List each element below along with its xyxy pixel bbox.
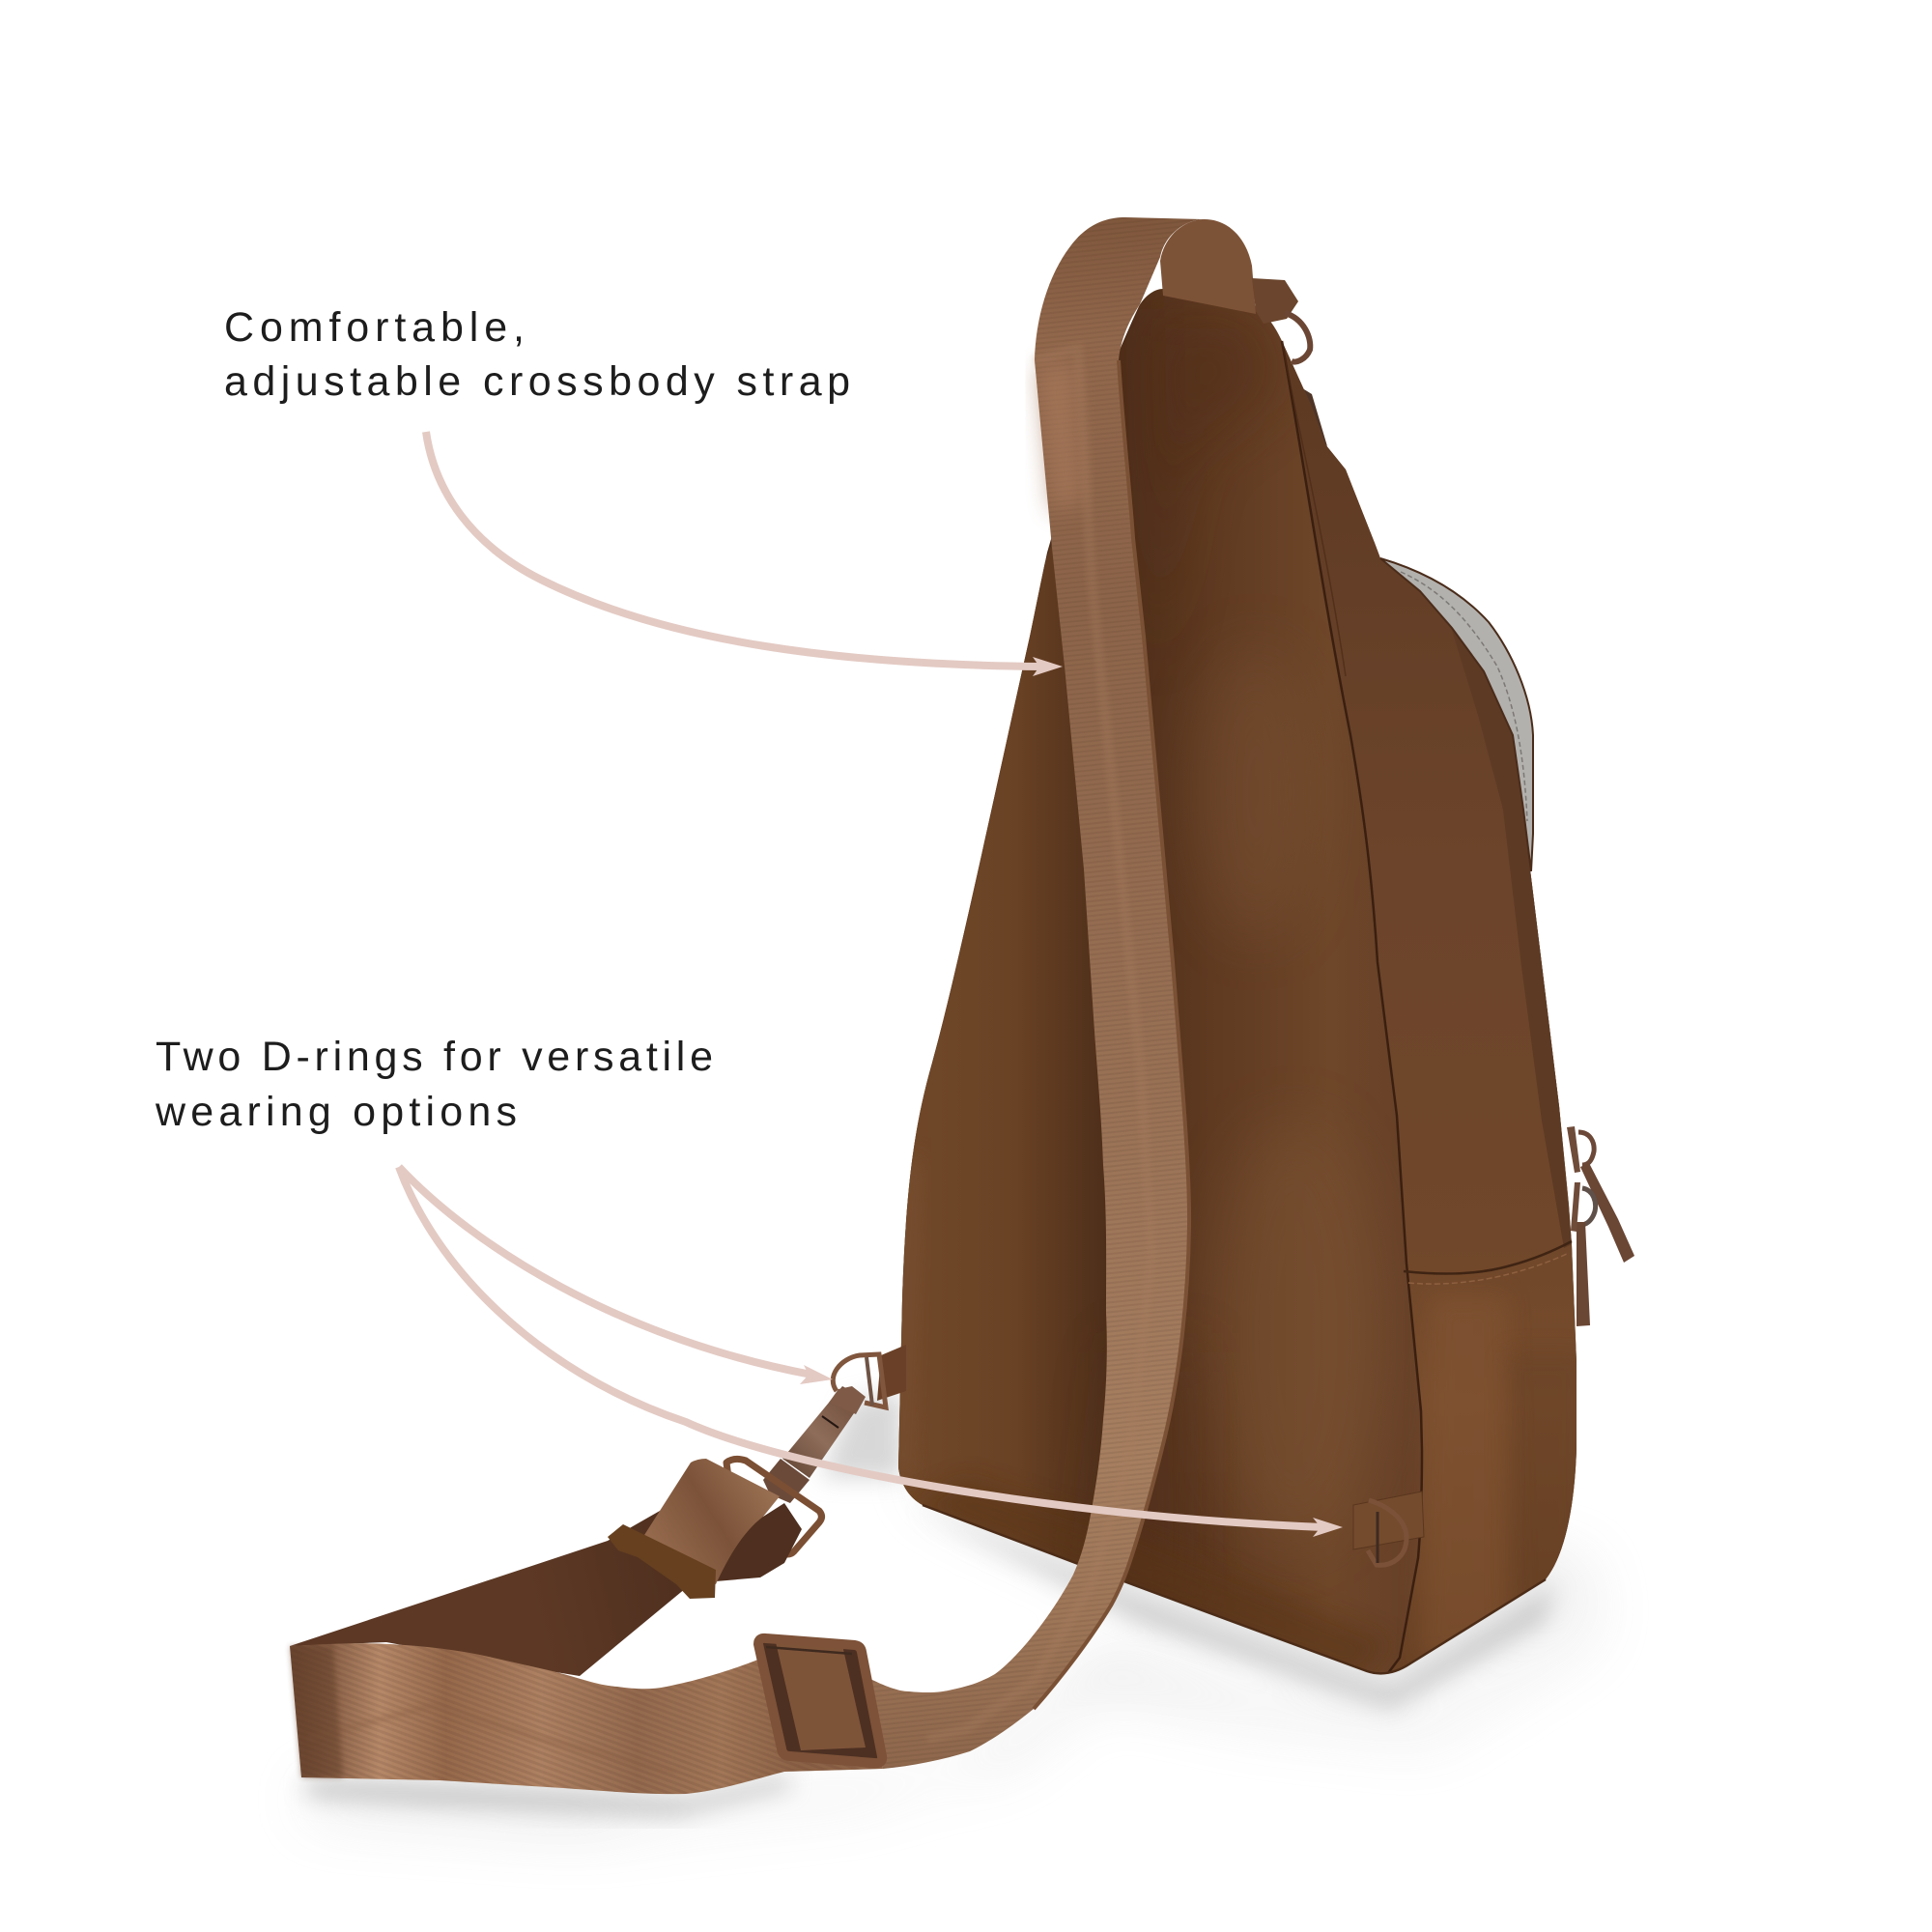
- upper loop strap: [638, 1459, 780, 1584]
- bottom seam: [923, 1505, 1546, 1673]
- arrow line: [399, 1167, 1323, 1527]
- strap body: [868, 217, 1203, 1769]
- left strap assembly: [290, 1459, 883, 1794]
- D-rings text line 1: Two D-rings for versatile: [156, 1034, 713, 1080]
- folded strap in buckle: [776, 1642, 866, 1750]
- callout text: D-rings: [155, 1034, 713, 1135]
- hook gate: [822, 1416, 838, 1428]
- band weave: [290, 1643, 883, 1794]
- zipper pulls: [1567, 1126, 1634, 1326]
- bag silhouette fill: [898, 289, 1577, 1673]
- top strap loop: [1160, 219, 1310, 361]
- strap centre band: [927, 348, 1151, 1739]
- arrow line: [426, 432, 1041, 667]
- strap weave: [868, 217, 1203, 1769]
- strap inner back: [1160, 219, 1256, 314]
- chevron shading on band: [307, 1705, 676, 1773]
- arrow: strap: [426, 432, 1063, 676]
- callout text: strap: [224, 304, 850, 405]
- pocket seam: [1404, 1241, 1572, 1273]
- top tab: [1252, 278, 1298, 324]
- buckle inner shadow: [766, 1647, 852, 1654]
- strap end shade: [290, 1646, 343, 1777]
- pull tab lower: [1577, 1222, 1590, 1326]
- second seam: [1282, 341, 1346, 676]
- arrow: right D-ring: [399, 1167, 1343, 1537]
- D-rings text line 2: wearing options: [155, 1089, 517, 1135]
- arrow line: [399, 1167, 811, 1375]
- arrow head: [1313, 1518, 1343, 1537]
- top hardware behind bag: [1299, 386, 1327, 446]
- buckle interior: [758, 1642, 882, 1760]
- arrow head: [1033, 657, 1063, 676]
- swivel hook: [763, 1386, 866, 1503]
- swivel base: [763, 1459, 810, 1503]
- arrow: left D-ring: [399, 1167, 833, 1384]
- hook body: [782, 1386, 865, 1478]
- dark back strap: [290, 1503, 802, 1676]
- side highlight: [1427, 1314, 1577, 1648]
- long strap: [868, 217, 1203, 1769]
- bag body: [889, 289, 1594, 1681]
- pull tab upper: [1580, 1163, 1634, 1263]
- ring: [1368, 1500, 1406, 1565]
- side panel: [1284, 346, 1577, 1579]
- infographic canvas: [156, 217, 1634, 1836]
- D-ring right: [1353, 1492, 1424, 1565]
- slider lower: [1571, 1182, 1580, 1232]
- pull loop upper: [1578, 1132, 1594, 1165]
- main band: [290, 1643, 883, 1794]
- top ring: [1285, 313, 1310, 361]
- grey zipper lining: [1380, 558, 1533, 871]
- slider upper: [1567, 1126, 1580, 1173]
- ring lower: [1580, 1188, 1596, 1225]
- strap text line 1: Comfortable,: [224, 304, 525, 351]
- left panel: [898, 545, 1079, 1553]
- seam line: [1282, 341, 1422, 1673]
- panel shading: [894, 309, 1391, 1681]
- strap edge stitch: [1034, 360, 1189, 1709]
- ring bar: [867, 1357, 872, 1406]
- square ring: [726, 1459, 821, 1554]
- strap upper highlight: [1038, 362, 1082, 512]
- ring tab: [877, 1345, 906, 1401]
- arrow head: [800, 1365, 833, 1384]
- keeper: [608, 1524, 716, 1599]
- ring tab: [1353, 1492, 1424, 1549]
- pocket stitching: [1408, 1254, 1567, 1284]
- zipper tape: [1452, 630, 1572, 1248]
- ring: [833, 1354, 886, 1407]
- hook top: [829, 1386, 866, 1414]
- ground shadows: [304, 1391, 1594, 1831]
- D-ring left: [833, 1345, 906, 1407]
- zipper stitching: [1401, 572, 1527, 821]
- buckle frame: [758, 1638, 882, 1763]
- ring bar: [1376, 1512, 1379, 1563]
- strap text line 2: adjustable crossbody strap: [224, 358, 850, 405]
- slider buckle: [758, 1638, 882, 1763]
